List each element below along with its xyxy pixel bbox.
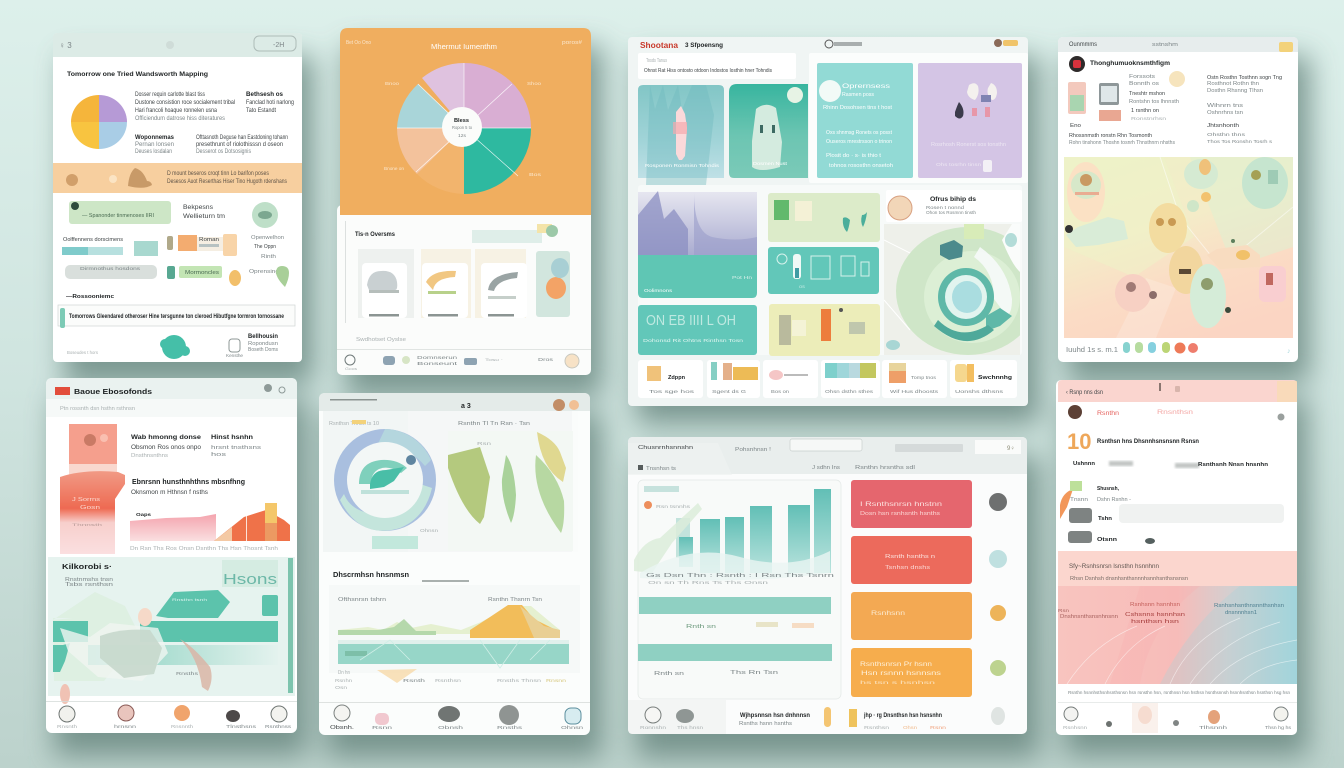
lilac image card xyxy=(918,63,1022,178)
metric rows: Roman xyxy=(199,237,219,243)
teal text card: tohnos rososthn onsetoh xyxy=(829,163,893,169)
teal text card: Rhinn Dosohsen tins t host xyxy=(823,105,892,111)
footer icons xyxy=(46,701,297,729)
section title: Dhscrmhsn hnsnmsn xyxy=(333,572,409,579)
footer strip: Wjhpsnnsn hsn dnhnnsn xyxy=(740,712,810,719)
map region: left valley xyxy=(1066,217,1128,247)
teal infographic band: Hsons xyxy=(223,571,277,588)
mountain range chart: Rsnthn Thsnrn Tsn xyxy=(488,597,542,603)
footer icons: Thsn hg hs xyxy=(1265,725,1292,730)
footer: Ropondusn xyxy=(248,341,278,347)
donut chart: Bless xyxy=(454,118,469,124)
image card: green figure: Dosmen Nust xyxy=(753,161,788,166)
footer icons: Obsnh. xyxy=(330,725,354,731)
panel: right map xyxy=(1058,37,1298,362)
footer icons: Ohnsn xyxy=(561,725,584,730)
panel: orange pie report: Bet Oo Ono xyxy=(346,40,371,46)
list rows: Dshn Rsnhn - xyxy=(1097,497,1131,503)
gradient wave chart: Rsnhsnn hsnnhsn xyxy=(1130,602,1180,608)
summary text: Woponnemas xyxy=(135,134,174,141)
text and thumbnails: Jhtsnhonth xyxy=(1207,123,1239,129)
footer strip: Ronnshn xyxy=(640,725,667,730)
teal strip one: Rnth sn xyxy=(686,624,716,630)
teal strip two: Rnth sn xyxy=(654,671,684,677)
text and thumbnails: Oshnrhns tsn xyxy=(1207,110,1243,116)
donut chart: 12s xyxy=(458,133,467,138)
teal strip two: Ths Rn Tsn xyxy=(730,670,778,676)
product cards xyxy=(358,249,570,318)
footer: Kensthe xyxy=(226,353,244,358)
teal text card: Ouseros mrestrsson o trinon xyxy=(826,139,892,145)
orange card 1: Rsnhsnn xyxy=(871,611,905,617)
pie callouts: Shoo xyxy=(527,81,542,86)
footer strip: Rsnn xyxy=(930,725,947,730)
teal text card: Rasmen poss xyxy=(842,92,874,98)
scale labels: Rsnhn xyxy=(335,678,353,683)
panel: right report with gradient xyxy=(1056,380,1297,735)
heading: Tomorrow one Tried Wandsworth Mapping xyxy=(67,71,208,78)
bottom swatch cards xyxy=(638,360,1017,398)
report text: Ebnrsnn hunsthnhthns mbsnfhng xyxy=(132,479,245,486)
pie callouts: Bnone on xyxy=(384,166,405,171)
bar chart card: Rsn tsnnhs xyxy=(656,504,691,509)
teal icon card xyxy=(768,247,879,294)
bottom swatch cards: Uonshs dthsns xyxy=(955,389,1004,394)
footer strip xyxy=(628,700,1005,734)
orange band: D mount beseros croqt tinn Lo barifon poses xyxy=(167,171,269,177)
report text: Oknsmon m Hthnsn f nsths xyxy=(131,490,208,496)
bar chart card: Gs Dsn Thn : Rsnth : I Rsn Ths Tsnrn xyxy=(646,573,834,579)
mountain range chart: Dn hn xyxy=(338,670,350,676)
map region: lower right xyxy=(1190,264,1226,328)
lilac image card: Ohs tosrhn tinsn xyxy=(936,162,982,167)
scale labels: Rsnth xyxy=(403,678,426,683)
mountain range chart: Ofthsnrsn tshrn xyxy=(338,597,386,603)
text and thumbnails: Rhossnmsth ronstn Rhn Tosmonth xyxy=(1069,133,1152,139)
bar chart card xyxy=(634,480,841,699)
header bar: ♀ 3 xyxy=(59,41,72,50)
numbered heading: Rsnthsn hns Dhsnnhsnsnsnn Rsnsn xyxy=(1097,439,1199,445)
panel: bottom center dashboard xyxy=(628,437,1027,734)
orange card 2: Hsn rsnnn hsnnsns xyxy=(861,671,941,677)
mountain chart card: Pot Hn xyxy=(732,275,753,280)
metric rows: Dirmnothus hosdons xyxy=(80,266,141,271)
red cover cards: J Sorrns xyxy=(72,497,101,503)
yellow card xyxy=(769,304,880,356)
title: 3 Sfpoensng xyxy=(685,43,723,49)
text and thumbnails: Forssots xyxy=(1129,74,1156,80)
red cover cards: Gosn xyxy=(80,505,100,511)
summary text: Dustone consistion roce socialement tribal xyxy=(135,100,235,106)
footer: Bellhousin xyxy=(248,334,278,340)
footer icons: Domnserun xyxy=(417,355,458,360)
text and thumbnails: Ronstnrhsn xyxy=(1131,116,1167,121)
orange card 2: hs tsn s hsnhsn xyxy=(860,680,936,685)
footer strip: Rsnths hsnn hsnths xyxy=(739,721,793,727)
red card 1 xyxy=(851,480,1007,528)
image card: green figure xyxy=(729,84,808,178)
teal infographic band: Rnstnmshs tnsn xyxy=(65,577,113,583)
list rows: Otsnn xyxy=(1097,537,1118,543)
footer icons: Rnsnth xyxy=(57,724,78,729)
report text: hos xyxy=(211,452,227,458)
footer strip: Ths hnsn xyxy=(677,725,704,730)
header tabs: Ounmmms xyxy=(1069,42,1097,48)
text and thumbnails: Tneshtr mshon xyxy=(1129,91,1165,97)
mountain chart card xyxy=(638,191,757,298)
orange card 1 xyxy=(851,592,1006,640)
numbered heading: 10 xyxy=(1067,429,1091,454)
teal infographic band: Rnsths xyxy=(176,671,199,676)
text and thumbnails: Eno xyxy=(1070,123,1081,129)
text and thumbnails: Thos Tos Ronshn Tosrh s xyxy=(1207,139,1273,144)
footer strip: Ohsn xyxy=(903,725,918,730)
callout card xyxy=(886,190,1022,222)
bottom swatch cards: Tos sge hos xyxy=(649,389,695,394)
pink text band: Rhsn Dsnhsh dnsnhsnthsnnnhsnnhsnthsnsnsn xyxy=(1070,576,1188,582)
header xyxy=(46,378,297,417)
scale labels: Rnsnn xyxy=(546,678,567,683)
ring gauge card xyxy=(323,411,578,552)
summary text: Bethsesh os xyxy=(246,91,283,98)
browser tabs: 9♀ xyxy=(1007,446,1015,452)
lilac image card: Rosrhosh Ronerst sos tonsthn xyxy=(931,142,1006,148)
pie callouts: Bnoo xyxy=(385,81,400,86)
header xyxy=(319,393,590,411)
scale labels: Osn xyxy=(335,685,348,690)
metric rows: Mormoncles xyxy=(185,270,220,276)
teal text card: Oxs shnmsg Ronets os posst xyxy=(826,130,892,136)
panel: top-left report xyxy=(53,33,302,362)
gradient wave chart: Rsnhsnhsnthnsnnthsnhsn xyxy=(1214,603,1284,609)
numbered heading xyxy=(1067,429,1199,454)
map region: top right xyxy=(1242,157,1288,209)
browser tabs: Rsnthn hrsnths sdl xyxy=(855,465,915,471)
footer: Boseudes t hors xyxy=(67,350,99,355)
footer icons: Tosu · xyxy=(485,357,503,362)
overview section: Tis·n Oversms xyxy=(355,231,395,238)
section label: —Rossooniemc xyxy=(66,294,114,300)
footer icons: Rnsths xyxy=(497,725,523,730)
teal stat card xyxy=(638,305,757,355)
footer icons: Dros xyxy=(538,357,554,362)
panel: orange pie report: poros# xyxy=(562,40,582,46)
intro card xyxy=(638,53,796,79)
footer: Boseth Doms xyxy=(248,347,278,353)
header tabs xyxy=(1058,37,1298,52)
list rows: Tshn xyxy=(1098,516,1113,522)
metric rows: Openwelhon xyxy=(251,235,284,241)
text and thumbnails: Dosthn Rhsnng Tlhsn xyxy=(1207,88,1263,94)
ring gauge card: Rsnthsn Thnsn ts 10 xyxy=(329,421,379,427)
orange band xyxy=(53,163,302,193)
header: Baoue Ebosofonds xyxy=(74,389,152,396)
text and thumbnails: Wihnrn tns xyxy=(1207,103,1244,109)
scale labels: Thnsn xyxy=(521,678,542,683)
red card 2: Rsnth hsnths n xyxy=(885,554,935,560)
browser tabs xyxy=(628,437,1027,475)
browser tabs: Tnsnhsn ts xyxy=(646,466,676,472)
pink header: ‹ Rsnp nns dsn xyxy=(1066,390,1103,396)
summary text: Fanclad hoti narlong xyxy=(246,100,294,106)
leaf chart xyxy=(448,431,573,551)
map region: lower center xyxy=(1169,246,1203,294)
summary text: Desserot os Dotsosignis xyxy=(196,149,251,155)
profile row: Rsnthn xyxy=(1097,411,1119,417)
green mini card xyxy=(768,193,880,242)
bottom swatch cards: Wif Hus dhoosts xyxy=(890,389,939,394)
map region: top left xyxy=(1067,162,1105,222)
bottom swatch cards: Ohsn dsthn sthes xyxy=(825,389,874,394)
pie callouts: Bos xyxy=(529,172,542,177)
bottom swatch cards: Swchnnhg xyxy=(978,375,1012,381)
donut chart: Ropon 5 to xyxy=(452,125,472,130)
list rows: Shusnsh, xyxy=(1097,486,1120,492)
report text: Wab hmonng donse xyxy=(131,434,201,441)
data row: Ushnnn xyxy=(1073,461,1095,467)
leaf chart: Rsn xyxy=(477,441,492,446)
bottom swatch cards: Bos on xyxy=(771,389,790,394)
map region: lower left xyxy=(1115,274,1151,312)
bottom swatch cards: Tomp tnos xyxy=(911,375,937,380)
data row xyxy=(1073,461,1269,468)
gradient wave chart xyxy=(1058,586,1297,684)
image card: teal figure: Rosponen Ronmisn Tohndis xyxy=(645,163,720,168)
list rows xyxy=(1060,481,1284,544)
list rows: Tnsnn xyxy=(1070,497,1088,503)
footer icons: Bonseunt xyxy=(417,361,459,366)
footer icons: Obnsh xyxy=(438,725,464,730)
gradient wave chart: Rsn xyxy=(1058,608,1070,613)
legend dots: Iuuhd 1s s. m.1 xyxy=(1066,347,1118,354)
summary text: Pernan lonsen xyxy=(135,142,174,148)
panel: central dashboard xyxy=(628,37,1040,406)
report text: Dnsthnsnthns xyxy=(131,453,169,459)
footer icons xyxy=(1058,702,1297,733)
scale labels: Rsnthsn xyxy=(435,678,462,683)
browser tabs: Chusnrnhsnnshn xyxy=(638,445,693,451)
teal infographic band xyxy=(48,557,295,704)
scale labels: Rnsths xyxy=(497,678,520,683)
bottom swatch cards: Zdppn xyxy=(668,375,685,381)
metric rows: Oolffennens dorscimens xyxy=(63,237,123,243)
pink text band xyxy=(1058,551,1297,586)
green callout: Bekpesns xyxy=(183,205,213,211)
metric rows: Rinth xyxy=(261,254,276,260)
teal text card: Plosit do · s· is thio t xyxy=(826,153,882,159)
teal strip two xyxy=(638,644,832,677)
panel: bottom-left report xyxy=(46,378,297,733)
footer icons: hrnsnn xyxy=(114,724,137,729)
footer icons: Rnsnnth xyxy=(171,724,194,729)
pie callouts xyxy=(384,81,542,177)
header: a 3 xyxy=(461,403,471,410)
lower tile container xyxy=(638,185,1022,355)
orange band: Desesos Auot Reserthas Hiser Tino Hugoth rdenshans xyxy=(167,179,287,185)
text and thumbnails: Ostn Rosthn Tosthnn sogn Tng xyxy=(1207,75,1282,81)
map region: top center xyxy=(1184,159,1218,189)
pie chart xyxy=(71,95,127,149)
callout card: Rosen t nonnd xyxy=(926,205,965,210)
metric rows xyxy=(62,234,289,287)
orange card 2: Rsnthsnrsn Pr hsnn xyxy=(860,662,932,668)
report text xyxy=(131,434,262,496)
scale labels xyxy=(335,669,567,690)
red card 2 xyxy=(851,536,1007,584)
footer icons: Tlhsnnh xyxy=(1199,725,1228,730)
metric rows: The Oppn xyxy=(254,244,276,250)
summary text: Tato Estandt xyxy=(246,108,276,114)
footer icons: Rsnhsnn xyxy=(1063,725,1088,730)
map region: far right xyxy=(1259,266,1286,302)
summary text: Hari francoli hoaque ronnelen usna xyxy=(135,108,218,114)
teal text card: Oprernsess xyxy=(842,84,890,90)
teal strip one xyxy=(639,597,831,630)
image card: teal figure xyxy=(638,85,724,185)
teal icon card: OS xyxy=(799,284,805,289)
profile row xyxy=(1068,405,1284,420)
text and thumbnails: Ohsthn thns xyxy=(1207,132,1246,137)
gradient wave chart: Dnshnsnthsnsnhnsnn xyxy=(1060,614,1118,620)
quote strip: Tomorrows Gleendared otheroser Hine tersgunne ton cleroed Hibutfgne tormron tornossane xyxy=(69,313,284,320)
radial map xyxy=(884,224,1020,355)
summary text: Deuses losdalan xyxy=(135,149,172,155)
green callout: — Spanonder tinmenoses IIRI xyxy=(82,213,154,219)
text and thumbnails xyxy=(1068,71,1282,146)
intro card: Ohnst Rat Hiss ontosto otdoon Indostos Iosthin hner Tohndis xyxy=(644,68,772,74)
map heading: Thonghumuoknsmthfigm xyxy=(1090,60,1170,67)
header tabs: sstnshm xyxy=(1152,42,1178,48)
area chart xyxy=(130,503,290,552)
title: Mhermut Iumenthm xyxy=(431,44,497,51)
map region: center xyxy=(1149,203,1187,253)
header bar: -2H xyxy=(273,42,284,49)
mountain chart card: Oolimnons xyxy=(644,288,673,293)
intro card: Tosds Tanus xyxy=(646,58,667,64)
teal infographic band: Tsbs rsnthsn xyxy=(65,582,113,588)
ring gauge card: Rsnthn Tl Tn Rsn · Tsn xyxy=(458,421,530,427)
teal stat card: ON EB IIII L OH xyxy=(646,312,736,329)
mountain range chart xyxy=(329,585,580,676)
summary text: presethrunt of riolothisssn d oseon xyxy=(196,142,283,148)
metric rows: Oprensing xyxy=(249,269,279,275)
orange card 2 xyxy=(851,648,1006,697)
bar chart card: On sn Th Rns Ts Ths Onsn xyxy=(648,580,769,585)
ring gauge card: Ohnsn xyxy=(420,528,439,533)
legend dots: ♪ xyxy=(1287,348,1290,355)
gradient wave chart: hsnthsn hsn xyxy=(1131,619,1179,625)
legend dots xyxy=(1066,342,1290,355)
teal text card xyxy=(809,53,1028,183)
area chart: Dn Rsn Ths Ros Onsn Dsnthn Ths Hsn Thosnt Tsnh xyxy=(130,546,278,552)
red card 1: Dosn hsn rsnhsnth hsnths xyxy=(860,511,940,517)
panel: ring and mountain report xyxy=(319,393,590,735)
teal infographic band: Rnsthn tsnh xyxy=(172,597,207,602)
footer xyxy=(67,334,278,359)
map heading xyxy=(1069,56,1170,72)
teal infographic band: Kilkorobi s· xyxy=(62,564,112,571)
text and thumbnails: Rohn tinshonn Thoshn tosnrh Thnsthnrn nhsths xyxy=(1069,140,1175,146)
overview section xyxy=(345,221,558,323)
summary text: Ofttasnoth Deguse han Eastdoning tohann xyxy=(196,135,288,141)
footer icons: Goos xyxy=(345,366,357,371)
footer icons: Rsnn xyxy=(372,725,393,730)
header bar xyxy=(53,33,302,57)
gradient wave chart: Cshsnns hsnnhsn xyxy=(1125,612,1185,618)
callout card: Ofrus bihip ds xyxy=(930,197,977,203)
report text: hrsnt tnsthsns xyxy=(211,445,262,451)
browser tabs: J sdhn Ins xyxy=(812,465,841,471)
footer strip: Rsnthsn xyxy=(864,725,890,730)
summary text: Dosser requin carlotte blast tiss xyxy=(135,92,205,98)
quote strip xyxy=(58,305,295,328)
title xyxy=(640,39,1018,50)
text and thumbnails: Bonnth os xyxy=(1129,81,1160,87)
footer icons: Rsnthnss xyxy=(265,724,292,729)
illustrated map xyxy=(1064,157,1293,338)
gradient wave chart: dnsnnnhsn1 xyxy=(1225,610,1257,616)
red card 1: I Rsnthsnrsn hnstnn xyxy=(860,502,942,508)
green callout: Wellieturn tm xyxy=(183,214,225,220)
bottom swatch cards: Sgent ds G xyxy=(712,389,747,394)
donut chart xyxy=(397,63,531,194)
footer icons xyxy=(337,349,591,371)
footnote: Swdhotset Oyslse xyxy=(356,337,406,343)
area chart: Oaps xyxy=(136,512,152,517)
red cover cards: Thnnsth xyxy=(72,522,102,527)
red cover cards xyxy=(60,424,125,554)
section title xyxy=(333,572,469,582)
red card 2: Tsnhsn dnshs xyxy=(885,565,931,571)
callout card: Ohon tos Rosmnn tinsth xyxy=(926,210,977,215)
pink header xyxy=(1058,380,1297,402)
panel: orange pie report xyxy=(337,28,591,375)
footer icons xyxy=(319,702,590,731)
text and thumbnails: Rosthnot Rothn thn xyxy=(1207,81,1259,87)
footer icons: Tlnsthsns xyxy=(226,724,257,729)
summary text: Officiendum datrose hiss diteratures xyxy=(135,116,225,122)
profile row: Rnsnthsn xyxy=(1157,410,1193,416)
data row: Rsnthsnh Nnsn hnsnhn xyxy=(1198,462,1269,468)
text and thumbnails: 1 rsnthn on xyxy=(1131,108,1159,114)
browser tabs: Pohsnhnsn ! xyxy=(735,447,771,453)
pink text band: Sfy~Rsnhsnrsn lsnsthn hsnnhnn xyxy=(1069,564,1159,570)
teal stat card: Dohonsd Rit Ohtns Rinthsn Tosn xyxy=(643,338,744,343)
summary text xyxy=(135,91,294,155)
fine print: Rsnthn hsnnhsthsnhsnthsnsn hsn rsnsthn hsn, rsnthnsn hsn hsthsn hsnthsnnsh hsnnhsnthsn hsnthsn hsg hsn xyxy=(1068,690,1291,695)
header: Ptn rossnth dsn hsthn rsthnsn xyxy=(60,406,135,412)
title: Shootana xyxy=(640,41,679,50)
report text: Obsmon Ros onos onpo xyxy=(131,444,201,451)
green callout xyxy=(69,201,278,228)
text and thumbnails: Rontshn tos lhnnsth xyxy=(1129,99,1179,105)
footer strip: jhp · rg Dnsnthsn hsn hsnsnhn xyxy=(863,712,942,719)
report text: Hinst hsnhn xyxy=(211,435,253,441)
